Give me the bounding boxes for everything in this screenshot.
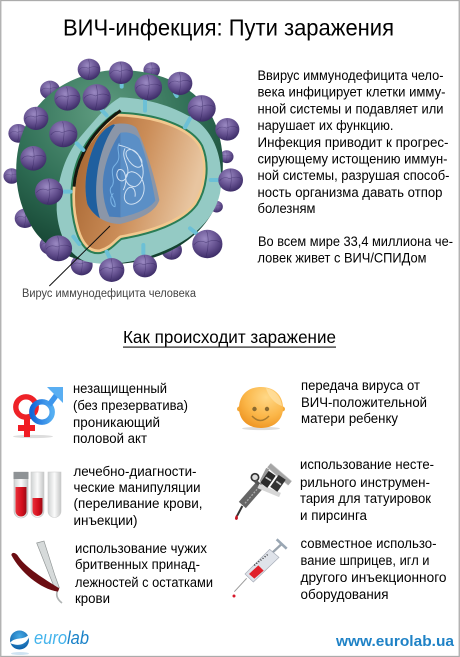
front spikes bbox=[20, 59, 243, 282]
icon: baby face bbox=[237, 387, 285, 430]
text: unprotected sex: проникающий bbox=[73, 415, 160, 430]
stems bbox=[64, 82, 222, 258]
icon: gender symbols bbox=[13, 387, 63, 438]
text: medical manipulations: ческие манипуляции bbox=[74, 480, 200, 495]
tan interior bbox=[74, 115, 204, 251]
statistic text block bbox=[258, 234, 453, 266]
text: medical manipulations: лечебно-диагности- bbox=[74, 464, 196, 479]
text: non-sterile tattoo tools bbox=[300, 457, 434, 523]
capsid membrane and matrix bbox=[74, 115, 204, 251]
intro text block: века инфицирует клетки имму- bbox=[258, 85, 446, 100]
pointer line bbox=[49, 226, 110, 286]
text: shared razors: использование чужих bbox=[75, 541, 207, 556]
intro text block: нной системы и подавляет или bbox=[258, 102, 444, 116]
logo: eurolab bbox=[10, 628, 89, 655]
intro text block: ной системы, разрушая способ- bbox=[258, 168, 450, 183]
statistic text block: ловек живет с ВИЧ/СПИДом bbox=[258, 250, 426, 266]
section heading: Как происходит заражение bbox=[123, 327, 336, 347]
core grey shell bbox=[86, 124, 159, 224]
intro text block: сирующему истощению иммун- bbox=[258, 152, 448, 166]
text: shared syringes: оборудования bbox=[300, 587, 388, 602]
intro text block bbox=[258, 68, 450, 216]
shadow edge bbox=[74, 111, 121, 187]
text: shared syringes bbox=[300, 536, 446, 602]
text: medical manipulations: (переливание крови, bbox=[74, 496, 202, 511]
text: unprotected sex: половой акт bbox=[73, 431, 147, 446]
envelope cut band bbox=[57, 97, 221, 264]
intro text block: болезням bbox=[258, 201, 316, 216]
text: shared razors: бритвенных принад- bbox=[75, 557, 200, 572]
text: unprotected sex: незащищенный bbox=[73, 381, 167, 396]
website url: www.eurolab.ua bbox=[335, 633, 455, 650]
text: non-sterile tattoo tools: использование несте- bbox=[300, 457, 434, 472]
text: shared syringes: совместное использо- bbox=[300, 536, 436, 551]
intro text block: Инфекция приводит к прогрес- bbox=[258, 135, 448, 150]
virus caption: Вирус иммунодефицита человека bbox=[22, 288, 197, 300]
text: shared syringes: другого инъекционного bbox=[300, 570, 446, 585]
core blue left half bbox=[103, 133, 121, 217]
back spikes bbox=[3, 62, 234, 275]
logo: eurolab: eurolab bbox=[34, 628, 89, 648]
text: medical manipulations bbox=[74, 464, 202, 528]
icon: syringe bbox=[232, 539, 287, 597]
title: ВИЧ-инфекция: Пути заражения bbox=[63, 14, 394, 40]
intro text block: ность организма давать отпор bbox=[258, 185, 442, 200]
intro text block: Ввирус иммунодефицита чело- bbox=[258, 68, 444, 83]
text: mother to child: ВИЧ-положительной bbox=[301, 395, 427, 410]
core blue right half bbox=[121, 132, 155, 217]
text: medical manipulations: инъекции) bbox=[74, 513, 138, 528]
text: mother to child bbox=[301, 378, 427, 426]
text: unprotected sex: (без презерватива) bbox=[73, 398, 188, 413]
text: shared razors bbox=[75, 541, 213, 606]
text: non-sterile tattoo tools: и пирсинга bbox=[300, 508, 367, 523]
text: shared razors: крови bbox=[75, 591, 110, 606]
text: mother to child: матери ребенку bbox=[301, 411, 398, 426]
icon: blood tubes bbox=[14, 472, 61, 518]
RNA strands bbox=[117, 145, 144, 204]
text: mother to child: передача вируса от bbox=[301, 378, 420, 393]
core dark blue side bbox=[86, 124, 115, 218]
text: shared razors: лежностей с остатками bbox=[75, 575, 213, 590]
statistic text block: Во всем мире 33,4 миллиона че- bbox=[258, 234, 453, 249]
text: unprotected sex bbox=[73, 381, 188, 446]
text: shared syringes: вание шприцев, игл и bbox=[300, 553, 430, 568]
intro text block: нарушает их функцию. bbox=[258, 118, 394, 133]
icon: razor bbox=[11, 541, 62, 603]
illustration: HIV virus cross-section bbox=[3, 59, 243, 286]
icon: tattoo machine bbox=[235, 465, 290, 520]
text: non-sterile tattoo tools: тария для татуировок bbox=[300, 491, 431, 506]
virus outer envelope bbox=[16, 70, 223, 264]
text: non-sterile tattoo tools: рильного инструмен- bbox=[300, 475, 430, 490]
